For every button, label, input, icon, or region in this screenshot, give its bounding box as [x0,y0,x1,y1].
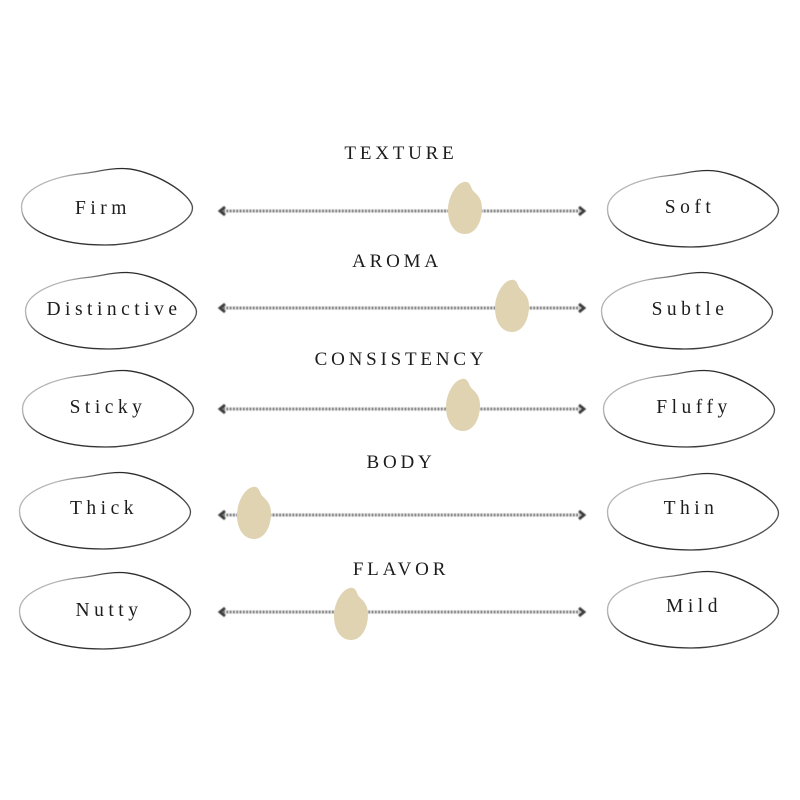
row: consistency [22,370,774,447]
blob: thin [608,474,778,550]
blob: sticky [22,370,194,447]
scale arrow: consistency [220,405,584,413]
rice grain marker: texture [448,182,482,234]
blob: mild [608,572,778,648]
blob: sticky: Sticky [70,397,146,418]
blob: thick [20,472,190,549]
blob: mild: Mild [666,596,722,617]
blob: thick: Thick [70,498,138,519]
heading: consistency: CONSISTENCY [315,349,487,370]
blob: distinctive: Distinctive [46,299,182,320]
row: texture [22,168,778,247]
blob: thin: Thin [664,498,718,519]
scale arrow: flavor [220,608,584,616]
row: body [20,472,778,550]
blob: soft [608,170,778,247]
rice grain marker: aroma [495,280,529,332]
blob: nutty [20,572,190,649]
blob: firm: Firm [75,198,131,219]
heading: body: BODY [366,452,436,473]
blob: subtle: Subtle [652,299,728,320]
scale arrow: body [220,511,584,519]
heading: texture: TEXTURE [344,143,458,164]
rice grain marker: flavor [334,588,368,640]
blob: fluffy: Fluffy [656,397,732,418]
blob: firm [22,168,192,245]
heading: aroma: AROMA [352,251,442,272]
blob: nutty: Nutty [76,600,142,621]
scale arrow: aroma [220,304,584,312]
row: aroma [26,272,772,349]
blob: distinctive [26,272,196,349]
blob: subtle [602,272,772,349]
rice grain marker: consistency [446,379,480,431]
blob: fluffy [604,370,774,447]
scale arrow: texture [220,207,584,215]
rice grain marker: body [237,487,271,539]
row: flavor [20,572,778,649]
heading: flavor: FLAVOR [353,559,449,580]
blob: soft: Soft [665,197,715,218]
